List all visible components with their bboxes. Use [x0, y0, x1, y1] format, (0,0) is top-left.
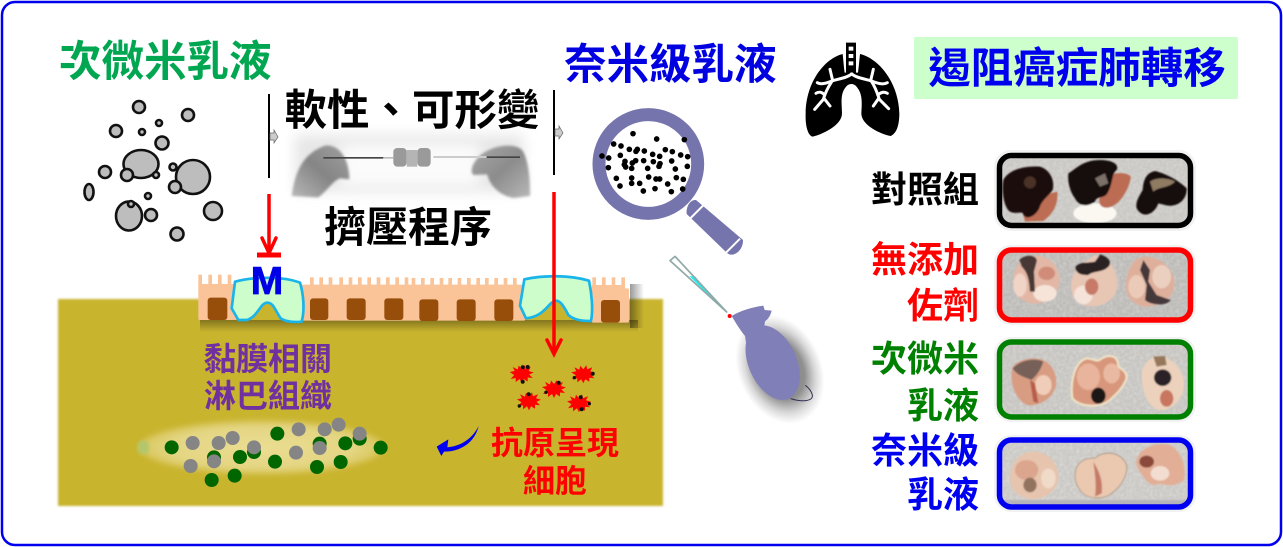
heading box: inhibit lung metastasis [914, 37, 1238, 99]
row: submicron emulsion [871, 338, 1194, 426]
heading box: inhibit lung metastasis: 遏阻癌症肺轉移 [928, 46, 1226, 93]
heading: nano emulsion: 奈米級乳液 [564, 42, 777, 89]
label: antigen presenting cells: 細胞 [523, 463, 587, 499]
heading: submicron emulsion: 次微米乳液 [59, 39, 272, 86]
divider left with small arrow [269, 94, 278, 178]
extrusion photo: hands and extruder [292, 135, 530, 198]
row: control group: 對照組 [871, 169, 979, 210]
arrow: blue curved [437, 426, 479, 456]
label: mucosa-associated lymphoid tissue [204, 341, 332, 414]
arrow: red inhibition [257, 194, 281, 255]
row: nano emulsion [871, 430, 1194, 515]
epithelial cell layer [198, 275, 644, 332]
divider right with small arrow [554, 90, 563, 175]
icon: mouse [719, 301, 841, 438]
panel: mucosal tissue [58, 299, 663, 506]
label: mucosa-associated lymphoid tissue: 淋巴組織 [204, 378, 332, 414]
M cell right [520, 276, 592, 321]
row: submicron emulsion: 次微米 [871, 338, 979, 379]
heading: soft and deformable: 軟性、可形變 [284, 88, 540, 135]
row: no adjuvant [871, 239, 1194, 326]
label: mucosa-associated lymphoid tissue: 黏膜相關 [204, 341, 332, 377]
heading: extrusion process: 擠壓程序 [324, 204, 492, 251]
arrow: red uptake [547, 192, 561, 354]
row: no adjuvant: 無添加 [871, 239, 979, 280]
label: antigen presenting cells [491, 425, 619, 499]
lymphoid follicle with particles [137, 418, 388, 487]
icon: submicron droplets [84, 101, 222, 240]
label: antigen presenting cells: 抗原呈現 [491, 425, 619, 461]
icon: lungs [806, 43, 899, 137]
row: nano emulsion: 乳液 [907, 474, 979, 515]
M cell left [232, 278, 303, 322]
row: nano emulsion: 奈米級 [871, 430, 979, 471]
icon: magnifying glass with nanoparticles [598, 114, 743, 255]
row: submicron emulsion: 乳液 [907, 385, 979, 426]
row: control group [871, 152, 1194, 229]
antigen presenting cells [510, 365, 595, 412]
row: no adjuvant: 佐劑 [907, 285, 979, 326]
icon: syringe [670, 256, 727, 312]
label: M: M [251, 260, 283, 303]
